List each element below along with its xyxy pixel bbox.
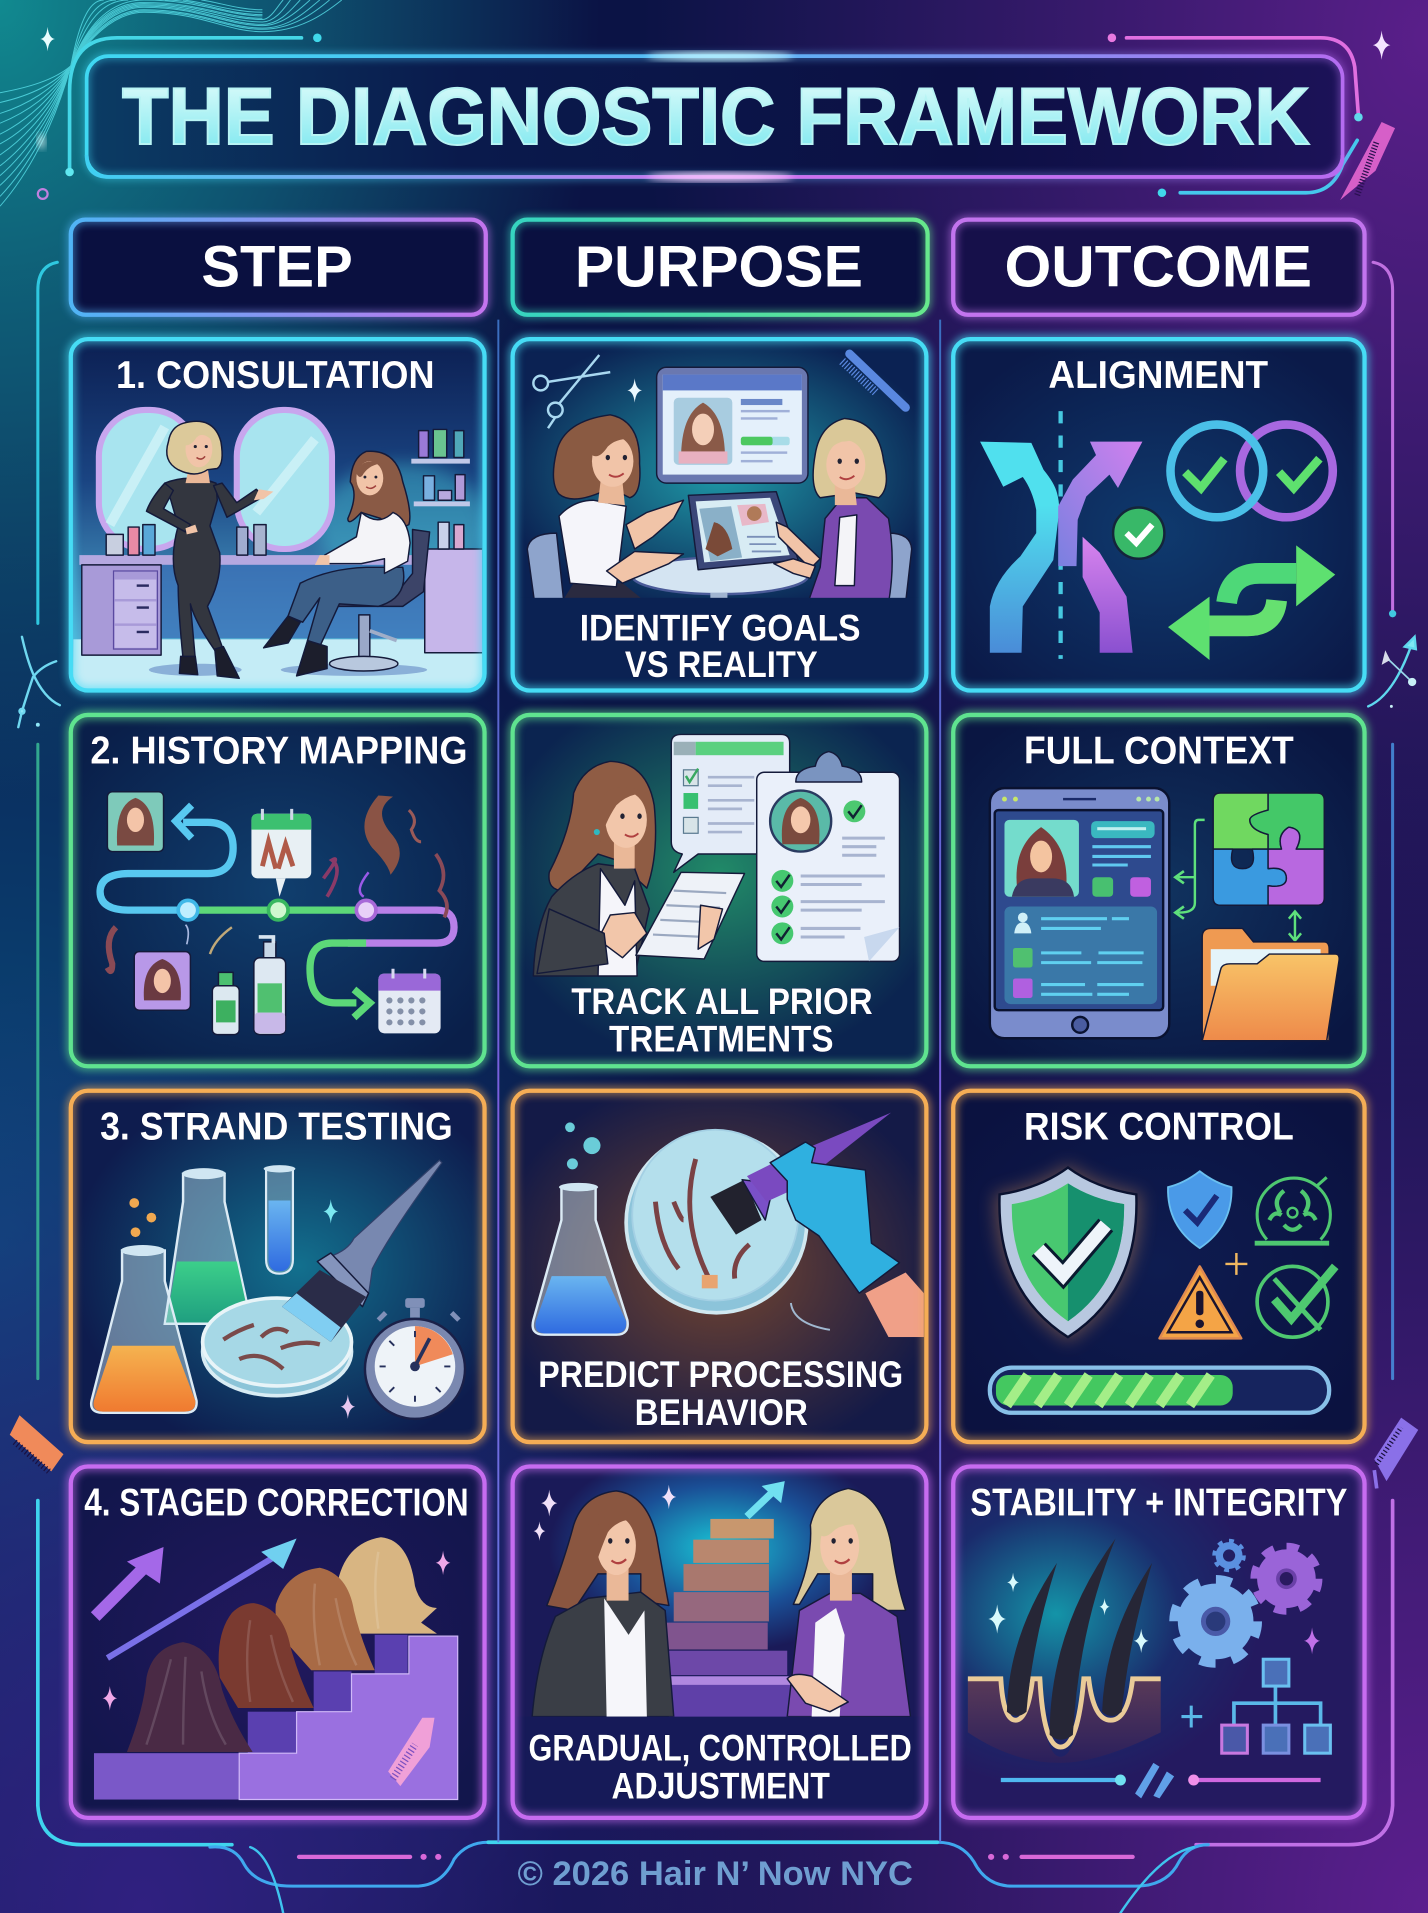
icon: crossed check — [1257, 1266, 1335, 1337]
woman writing — [533, 761, 745, 976]
header: PURPOSE: PURPOSE — [575, 235, 863, 300]
icon: linked rings — [1170, 425, 1333, 517]
title frame accents — [38, 34, 1363, 199]
purpose label — [571, 981, 873, 1060]
top-left wave pattern — [0, 0, 342, 206]
seated client — [264, 451, 410, 676]
purpose label: TREATMENTS — [609, 1019, 834, 1060]
timeline — [100, 805, 454, 1018]
panel: 2. History mapping — [71, 715, 485, 1066]
step label: 3. STRAND TESTING — [100, 1106, 453, 1149]
bottles — [212, 937, 286, 1035]
progress bar — [990, 1368, 1329, 1413]
stopwatch — [365, 1298, 465, 1419]
panel: Alignment — [953, 339, 1365, 691]
sparkles — [534, 1485, 676, 1541]
tint brush — [282, 1160, 442, 1342]
sparkles — [103, 1551, 450, 1710]
icon: right side scissors accent — [1368, 610, 1416, 708]
panel: Gradual, controlled adjustment — [513, 1466, 926, 1818]
sparkle — [1304, 1628, 1320, 1654]
purpose label: BEHAVIOR — [635, 1392, 808, 1433]
left woman — [553, 415, 683, 603]
sparkle top left — [40, 27, 55, 51]
icon: comb — [842, 354, 906, 407]
icon: right comb — [1374, 1418, 1418, 1488]
orange flask — [91, 1198, 197, 1413]
speech bubble checklist — [671, 734, 790, 872]
stairs — [94, 1635, 458, 1800]
test tube — [264, 1165, 295, 1274]
panel: Track all prior treatments — [513, 715, 926, 1066]
step label: 4. STAGED CORRECTION — [84, 1481, 469, 1524]
arrow — [747, 1491, 774, 1516]
sparkle top right — [1373, 31, 1390, 60]
petri dish — [203, 1298, 352, 1396]
icon: exchange arrows — [1168, 545, 1335, 660]
right woman — [774, 418, 892, 603]
sparkles — [988, 1573, 1149, 1653]
bottom accent bars — [1001, 1763, 1321, 1798]
purpose label: TRACK ALL PRIOR — [571, 981, 873, 1022]
portrait: top — [107, 792, 164, 852]
gears — [1174, 1541, 1318, 1663]
icon: tablet profile — [990, 788, 1169, 1038]
connector arrows — [1175, 820, 1301, 941]
header: STEP — [71, 220, 486, 315]
portrait: bottom — [134, 925, 190, 1010]
bubbles — [565, 1122, 600, 1169]
purpose label — [528, 1728, 912, 1806]
calendar — [378, 969, 441, 1033]
header: PURPOSE — [513, 220, 928, 315]
header: OUTCOME: OUTCOME — [1004, 235, 1312, 300]
hair swatches — [127, 1537, 437, 1752]
icon: scissors — [533, 355, 610, 428]
column dividers — [497, 320, 941, 1842]
clipboard — [757, 752, 900, 961]
small tweezers — [791, 1303, 830, 1330]
illustration: salon scene — [73, 410, 488, 691]
sparkles — [323, 1199, 355, 1419]
outcome label: FULL CONTEXT — [1024, 730, 1294, 773]
icon: puzzle — [1213, 793, 1324, 905]
growth arrows — [95, 1538, 297, 1658]
panel: Stability + integrity — [953, 1466, 1365, 1818]
illustration: two women at table — [516, 342, 924, 605]
panel: 4. Staged correction — [71, 1466, 485, 1818]
icon: sparkle plus — [1225, 1253, 1247, 1275]
panel: Predict processing behavior — [513, 1091, 926, 1442]
icon: main shield — [995, 1164, 1141, 1342]
blonde stylist — [146, 421, 273, 678]
outcome label: STABILITY + INTEGRITY — [970, 1481, 1347, 1524]
purpose label — [580, 608, 860, 685]
gloved hand with brush — [710, 1113, 924, 1337]
petri dish large — [626, 1130, 807, 1313]
left woman — [532, 1491, 674, 1717]
icon: small shield — [1168, 1171, 1232, 1248]
icon: sparkle — [627, 378, 642, 403]
arrow head — [762, 1481, 785, 1503]
footer copyright: © 2026 Hair N’ Now NYC — [517, 1855, 913, 1893]
icon: merging arrows — [980, 411, 1164, 659]
panel: 3. Strand testing — [71, 1091, 485, 1442]
purpose label: IDENTIFY GOALS — [580, 608, 860, 649]
step label: 1. CONSULTATION — [116, 354, 435, 397]
green flask — [165, 1168, 251, 1324]
calendar with hair swatches — [251, 809, 311, 897]
purpose label: VS REALITY — [625, 644, 818, 685]
panel: Full context — [953, 715, 1365, 1066]
hair follicle cross-section — [968, 1538, 1161, 1763]
purpose label: PREDICT PROCESSING — [538, 1354, 903, 1395]
header: OUTCOME — [953, 220, 1365, 315]
icon: left comb — [10, 1415, 63, 1471]
outcome label: ALIGNMENT — [1048, 354, 1268, 397]
panel: Risk control — [953, 1091, 1365, 1442]
title panel — [87, 52, 1343, 181]
panel: 1. Consultation — [71, 339, 488, 691]
icon: warning triangle — [1159, 1266, 1241, 1338]
staircase — [660, 1519, 818, 1718]
icon: top-right comb — [1340, 122, 1395, 200]
icon: pink comb — [388, 1718, 435, 1786]
right woman — [787, 1488, 911, 1717]
header: STEP: STEP — [201, 235, 353, 300]
hair strands — [107, 795, 447, 971]
icon: left side scissors accent — [18, 637, 60, 727]
org chart — [1181, 1659, 1330, 1753]
glow spot on wave — [38, 134, 45, 149]
purpose label: GRADUAL, CONTROLLED — [528, 1728, 912, 1768]
blue flask — [533, 1183, 628, 1335]
step label: 2. HISTORY MAPPING — [90, 730, 467, 773]
panel: Identify goals vs reality — [513, 339, 926, 691]
icon: biohazard — [1255, 1177, 1330, 1243]
outcome label: RISK CONTROL — [1024, 1106, 1294, 1149]
purpose label: ADJUSTMENT — [611, 1765, 830, 1806]
purpose label — [538, 1354, 903, 1433]
title text: THE DIAGNOSTIC FRAMEWORK — [122, 72, 1310, 162]
icon: folder — [1202, 928, 1339, 1041]
